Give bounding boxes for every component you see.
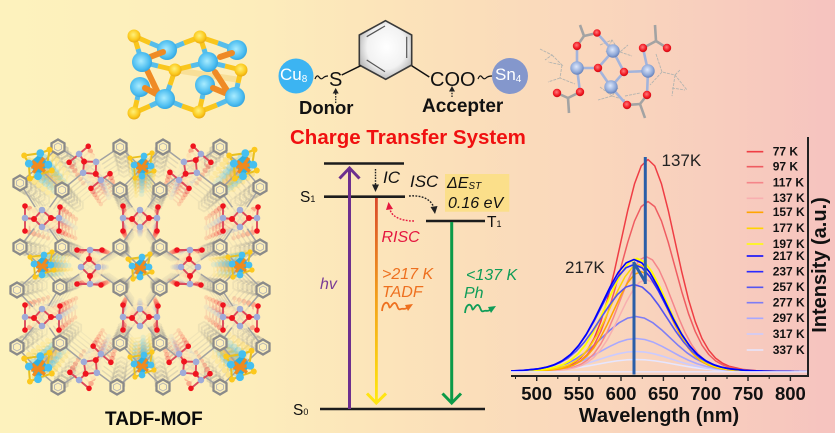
node: Sn4: 4 — [516, 74, 522, 85]
energy levels — [320, 164, 485, 409]
x-axis tick labels: 600 — [606, 383, 636, 404]
node: Cu8: Cu — [280, 65, 302, 84]
label: delta EST: ΔE — [447, 175, 468, 192]
x-axis tick labels: 700 — [690, 383, 721, 404]
node: Cu8 — [278, 58, 314, 94]
label: T1: T1 — [487, 214, 501, 231]
node: Sn4 — [492, 58, 528, 94]
legend: 117 K — [773, 176, 804, 190]
legend: 137 K — [773, 191, 805, 205]
arrow: donor — [333, 88, 339, 103]
arrow: TADF emission — [367, 198, 386, 403]
legend: 217 K — [773, 249, 805, 263]
label: Accepter: Accepter — [422, 96, 504, 117]
label: S1: S1 — [300, 189, 315, 206]
legend: 277 K — [773, 296, 805, 310]
legend: 97 K — [773, 160, 798, 174]
benzene ring — [359, 21, 412, 79]
legend: 257 K — [773, 280, 805, 294]
arrow: absorption hv — [340, 168, 360, 409]
legend: 157 K — [773, 205, 805, 219]
x-axis tick labels: 800 — [775, 383, 806, 404]
curves — [511, 158, 807, 372]
arrow: phosphorescence — [442, 222, 461, 403]
arrow: 217K trend — [632, 262, 636, 374]
x-axis title: Wavelength (nm) — [579, 405, 739, 427]
label: greater than 217 K: >217 K — [382, 266, 434, 283]
x-axis tick labels: 750 — [733, 383, 763, 404]
label: ISC: ISC — [410, 172, 439, 191]
label: IC: IC — [383, 168, 401, 187]
heading: Charge Transfer System: Charge Transfer System — [290, 126, 526, 149]
legend: 77 K — [773, 144, 798, 158]
label: Donor: Donor — [299, 97, 353, 118]
legend: 177 K — [773, 221, 805, 235]
framework front layer — [10, 140, 270, 394]
arrow: acceptor — [449, 86, 455, 97]
label: hv: hv — [320, 276, 338, 293]
label: Ph: Ph — [464, 285, 484, 302]
framework depth layers — [16, 145, 264, 389]
x-axis tick labels: 650 — [648, 383, 679, 404]
legend: 237 K — [773, 264, 805, 278]
icon: orange emission wave — [382, 303, 413, 311]
panel: Cu8 cluster model — [128, 30, 248, 120]
legend: 297 K — [773, 311, 805, 325]
panel: Sn4 cluster model — [540, 25, 687, 118]
arrow: internal conversion — [372, 169, 379, 192]
panel: energy level diagram — [293, 164, 518, 419]
label: 0.16 eV: 0.16 eV — [448, 195, 504, 212]
panel: TADF-MOF framework — [10, 140, 270, 394]
gap box — [445, 174, 509, 212]
legend: 317 K — [773, 327, 805, 341]
sulfur atom: S — [329, 69, 342, 91]
x-axis tick labels: 500 — [521, 383, 552, 404]
label: RISC: RISC — [382, 229, 420, 246]
panel: donor-acceptor linker molecule — [278, 21, 528, 118]
arrow: 137K trend — [634, 157, 645, 284]
label: 137K: 137K — [662, 151, 702, 170]
icon: green emission wave — [465, 305, 496, 313]
y-axis title: Intensity (a.u.) — [809, 197, 831, 333]
carboxyl group: COO — [430, 69, 476, 91]
arrow: intersystem crossing — [409, 196, 438, 214]
x-axis tick labels — [521, 383, 806, 404]
axes — [511, 137, 808, 381]
label: 217K: 217K — [565, 258, 605, 277]
label: TADF-MOF: TADF-MOF — [105, 409, 203, 430]
chart: temperature-dependent emission spectra — [511, 137, 830, 426]
label: delta EST: ST — [468, 181, 482, 192]
label: TADF: TADF — [382, 284, 424, 301]
arrow: reverse intersystem crossing — [386, 202, 414, 221]
legend: 197 K — [773, 237, 805, 251]
label: S0: S0 — [293, 402, 308, 419]
x-axis tick labels: 550 — [564, 383, 594, 404]
legend — [747, 144, 805, 357]
legend: 337 K — [773, 343, 805, 357]
node: Sn4: Sn — [495, 65, 516, 84]
node: Cu8: 8 — [302, 74, 308, 85]
label: less than 137 K: <137 K — [466, 267, 518, 284]
